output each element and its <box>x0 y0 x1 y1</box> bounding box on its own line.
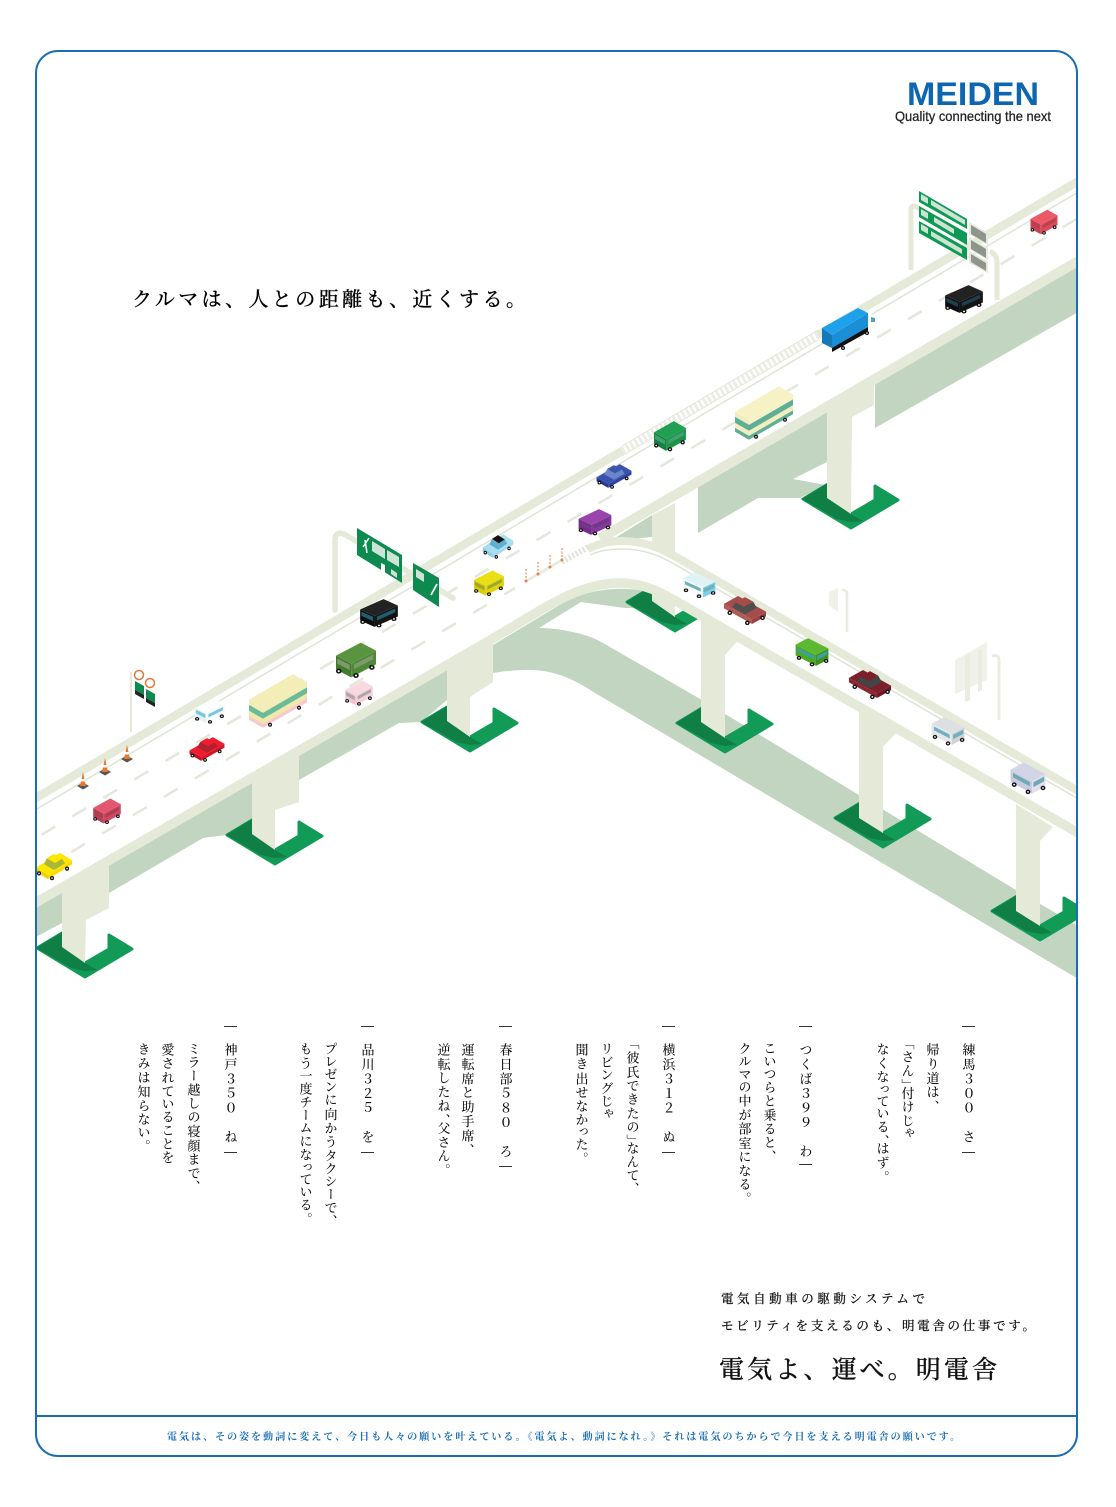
poem: つくば: クルマの中が部室になる。 <box>736 1043 752 1200</box>
pier footing <box>676 707 772 752</box>
poem: 品川: プレゼンに向かうタクシーで、 <box>322 1043 338 1223</box>
traffic cones <box>77 745 133 790</box>
noise barrier lattice <box>622 330 818 456</box>
vehicle: pale pink van <box>345 681 373 706</box>
speed sign pole <box>131 670 155 732</box>
vehicle: lavender van on ramp <box>1011 762 1045 794</box>
elevated highway illustration <box>30 180 1087 980</box>
pier footing <box>834 802 930 847</box>
ramp piers <box>701 612 1053 926</box>
poem: つくば: こいつらと乗ると、 <box>762 1043 776 1158</box>
poem: 横浜: リビングじゃ <box>598 1043 614 1120</box>
main road piers <box>62 380 874 963</box>
footer divider <box>36 1415 1077 1417</box>
poem: 横浜: 「彼氏できたの」なんて、 <box>624 1043 640 1190</box>
main road lower edge <box>30 583 1080 906</box>
vehicle: double-decker bus pastel <box>249 674 307 728</box>
vehicle: green van <box>654 421 686 451</box>
vehicle: pink-red van <box>93 798 121 824</box>
vehicle: red van far <box>1031 210 1057 235</box>
vehicle: yellow car <box>36 853 72 880</box>
ramp underside and ground shadow <box>493 589 1080 980</box>
pier footing <box>36 932 132 977</box>
poem: 練馬: 練馬３００ さ <box>960 1043 976 1144</box>
poem: 神戸: 神戸３５０ ね <box>222 1043 238 1144</box>
logo: MEIDEN: MEIDEN <box>907 76 1039 112</box>
poem: 春日部: 春日部５８０ ろ <box>498 1043 512 1159</box>
delineator posts <box>524 548 564 582</box>
footer statement: 電気は、その姿を動詞に変えて、今日も人々の願いを叶えている。《電気よ、動詞になれ。》それは電気のちからで今日を支える明電舎の願いです。 <box>167 1430 960 1443</box>
pier footing <box>226 819 322 864</box>
lane dashes lower <box>36 588 515 873</box>
poem: 春日部 <box>436 1026 512 1172</box>
vehicle: white cyan pickup on ramp <box>683 572 715 598</box>
poem: 練馬: 「さん」付けじゃ <box>900 1043 914 1140</box>
closing copy line 1: 電気自動車の駆動システムで <box>721 1291 925 1306</box>
poem: 神戸: 愛されていることを <box>160 1043 174 1166</box>
gore hatching <box>562 546 590 562</box>
poem: 品川: 品川３２５ を <box>360 1043 374 1144</box>
vehicle: black car right <box>945 285 983 313</box>
pier footing <box>802 483 898 528</box>
vehicle: white minibus <box>195 699 225 724</box>
poem: 横浜: 横浜３１２ ぬ <box>660 1043 676 1144</box>
lane dashes upper <box>36 217 1080 838</box>
poem: 横浜: 聞き出せなかった。 <box>574 1043 588 1160</box>
closing copy line 2: モビリティを支えるのも、明電舎の仕事です。 <box>721 1318 1035 1333</box>
poem: 春日部: 逆転したね、父さん。 <box>436 1043 450 1172</box>
poem: つくば <box>736 1026 812 1200</box>
vehicle: black car <box>360 599 398 627</box>
vehicle: green car on ramp <box>796 638 828 666</box>
vehicle: purple car <box>579 509 611 535</box>
pier footing <box>991 895 1087 940</box>
vehicle: double-decker bus cream <box>735 386 793 440</box>
vehicle: blue car <box>597 464 631 489</box>
pier footing behind ramp <box>625 591 698 632</box>
parapet inner line <box>30 191 1080 813</box>
vehicle: yellow van <box>474 570 504 596</box>
vehicle: maroon car on ramp <box>849 670 891 699</box>
poem: 神戸: ミラー越しの寝顔まで、 <box>186 1043 200 1188</box>
poem: 品川: もう一度チームになっている。 <box>298 1043 312 1221</box>
right gantry with direction signs <box>911 191 997 300</box>
poem: 春日部: 運転席と助手席、 <box>460 1043 474 1152</box>
poem: 練馬 <box>874 1026 976 1178</box>
slogan: 電気よ、運べ。明電舎 <box>719 1356 997 1384</box>
vehicle: brown-red car on ramp <box>724 596 766 625</box>
main road girders <box>36 261 1080 937</box>
vehicle: light blue car <box>483 534 513 559</box>
ramp upper parapet <box>588 541 1080 792</box>
ramp deck <box>652 550 724 614</box>
poem: 横浜 <box>574 1026 676 1190</box>
vehicle: silver car on ramp <box>932 717 964 745</box>
ramp parapet inner line <box>590 549 1080 800</box>
left gantry with direction signs <box>335 528 453 610</box>
poem: 練馬: なくなっている、はず。 <box>874 1043 890 1178</box>
pale ramp sign large <box>955 642 999 720</box>
poem: 神戸: きみは知らない。 <box>136 1043 150 1148</box>
poem: 練馬: 帰り道は、 <box>924 1043 940 1108</box>
pier footing <box>421 706 517 751</box>
main road right lower edge <box>600 260 1080 538</box>
poem: つくば: つくば３９９ わ <box>798 1043 812 1159</box>
logo tagline: Quality connecting the next <box>895 108 1051 124</box>
pale ramp sign small <box>829 588 847 632</box>
vehicle: red car <box>190 737 224 762</box>
poem: 神戸 <box>136 1026 238 1188</box>
vehicle: blue truck <box>822 308 876 352</box>
poem: 品川 <box>298 1026 374 1223</box>
main road upper parapet <box>30 180 1080 802</box>
vehicle: green jeep <box>336 643 376 678</box>
headline: クルマは、人との距離も、近くする。 <box>132 288 526 311</box>
